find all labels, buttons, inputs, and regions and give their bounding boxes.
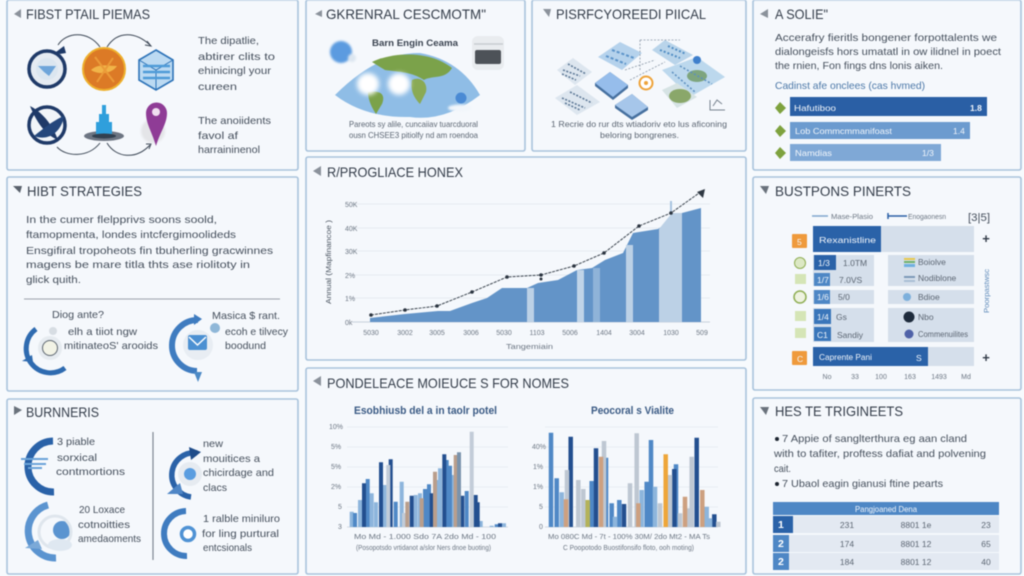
data table: 40 (981, 557, 991, 567)
axis titles: Annual (Mapfinancoe ) (326, 220, 333, 304)
icon text: left (52, 309, 158, 352)
axis titles (326, 220, 553, 351)
right cells: Nbo (918, 312, 934, 322)
x-axis labels: 3004 (629, 330, 645, 337)
horizontal bars: 1.4 (953, 126, 965, 136)
text block: first: abtirer clits to (198, 51, 275, 63)
icon: ring 1 (21, 441, 54, 492)
panel: hibt strategies (7, 177, 298, 391)
left x labels and note: (Posopotsdo vrtidanot a/slor Ners dnoe buoting) (356, 545, 491, 552)
heading: perspective: PISRFCYOREEDI PIICAL (556, 6, 706, 22)
left cells: 7.0VS (839, 275, 862, 285)
right y labels: 5 (539, 504, 543, 511)
axis numbers: 33 (851, 374, 859, 381)
data table: Pangjoaned Dena (855, 504, 917, 514)
status icons (794, 258, 806, 338)
chart titles: Esobhiusb del a in taolr potel (354, 405, 497, 417)
data table: 23 (981, 520, 991, 530)
top row (792, 226, 990, 252)
text block: first: The dipatlie, (198, 35, 259, 47)
icon: right ring with mail (172, 314, 220, 382)
x-axis labels: 1103 (529, 330, 545, 337)
text block: second (198, 115, 271, 156)
x-axis labels: 3002 (397, 330, 413, 337)
text block: second: harraininenol (198, 144, 260, 156)
text: ring 2 (78, 504, 141, 545)
heading: progress: R/PROGLIACE HONEX (327, 164, 464, 180)
y-axis labels: 50K (345, 202, 358, 209)
left y labels (329, 424, 343, 531)
left y labels: 2% (331, 484, 341, 491)
axis titles: Tangemiain (506, 344, 553, 351)
connector arrows (57, 35, 151, 155)
left cells (814, 255, 867, 341)
data table: 8801 1e (901, 520, 932, 530)
rotated side label: Poorpastwsc (984, 268, 991, 313)
left cells: 1.0TM (843, 258, 867, 268)
bottom row: + (982, 350, 990, 365)
heading: strategies: HIBT STRATEGIES (27, 183, 142, 199)
data table: 174 (840, 539, 854, 549)
data table (773, 502, 999, 570)
icon: navy globe ring (29, 46, 66, 87)
text: ring 3: clacs (203, 482, 227, 494)
text: ring 3: new (203, 438, 223, 450)
right bar chart (545, 427, 718, 527)
panel: a solie (753, 0, 1021, 170)
icon: ring 4 (164, 511, 194, 556)
bar chart title: Cadinst afe onclees (cas hvmed) (775, 80, 925, 92)
left cells: 1/3 (818, 258, 830, 268)
icon: purple location pin (141, 102, 167, 146)
matrix blocks (813, 226, 974, 366)
heading: burnneris: BURNNERIS (26, 404, 99, 420)
paragraph: glick quith. (26, 274, 81, 286)
x-axis labels: 1030 (663, 330, 679, 337)
data table: 231 (840, 520, 854, 530)
text block: first: ehinicingl your (198, 65, 272, 77)
bullet text (773, 433, 986, 490)
text block: first (198, 35, 275, 93)
right y labels: 1% (533, 484, 543, 491)
text: ring 3: mouitices a (203, 453, 260, 465)
left bar chart (347, 427, 508, 527)
chart titles: Peocoral s Vialite (591, 405, 674, 417)
x-axis labels: 3005 (429, 330, 445, 337)
top row: Rexanistline (819, 235, 876, 245)
panel: general cescmotm (306, 0, 525, 151)
left cells: Sandiy (837, 330, 864, 340)
text block: second: favol af (198, 130, 238, 142)
paragraph: In the cumer flelpprivs soons soold, (26, 214, 217, 226)
horizontal bars: Hafutiboo (794, 103, 836, 113)
icon text: right (212, 310, 289, 352)
x-axis labels (363, 330, 708, 337)
y-axis labels: 1% (345, 296, 355, 303)
heading: first trail plans: FIBST PTAIL PIEMAS (26, 6, 150, 22)
axis numbers: 100 (875, 374, 887, 381)
icon: orange medallion (83, 48, 125, 90)
right x labels and note: Mo 080C Md - 7t - 100% 30M/ 2do Mt2 - MA Ts (548, 534, 711, 541)
text block: first: cureen (198, 81, 237, 93)
y-axis labels: 0k (345, 320, 353, 327)
x-axis labels: 509 (696, 330, 708, 337)
x-axis labels: 5030 (496, 330, 512, 337)
area chart (352, 189, 710, 322)
paragraph: magens be mare titla thts ase riolitoty in (26, 259, 250, 271)
panel: burnneris (7, 399, 298, 574)
paragraph: dialongeisfs hors umatatl in ow ilidnel in poect (775, 46, 1001, 58)
bullet text: cait. (774, 463, 791, 475)
caption: 1 Recrie do rur dts wtiadoriv eto lus aficoning (551, 119, 727, 129)
text: ring 4: 1 ralble miniluro (203, 513, 280, 525)
data table: 65 (981, 539, 991, 549)
right cells: Bdioe (918, 292, 940, 302)
x-axis labels: 5006 (562, 330, 578, 337)
caption: beloring bongrenes. (600, 130, 679, 140)
paragraph: Accerafry fieritls bongener forpottalents we (775, 32, 997, 44)
panel: buttons pinerts table (753, 177, 1021, 390)
bottom row: C (797, 354, 803, 364)
right y labels (532, 444, 546, 531)
caption (551, 119, 727, 140)
bottom row: Caprente Pani (819, 352, 872, 362)
paragraph: Ensgifiral tropoheots fin tbuherling gracwinnes (26, 245, 273, 257)
panel: heste triggers (753, 398, 1021, 574)
text: ring 4: for ling purtural (202, 528, 279, 540)
text: ring 2: cotnoitties (78, 519, 130, 531)
legend: [3|5] (968, 212, 990, 224)
icon: navy swirl (29, 106, 65, 143)
legend: Mase-Plasio (831, 214, 873, 221)
y-axis labels (345, 202, 358, 327)
left cells: 1/7 (817, 275, 829, 285)
paragraph: ftamopmenta, londes intcfergimoolideds (26, 229, 236, 241)
x-axis labels: 1404 (596, 330, 612, 337)
data table: 2 (778, 556, 784, 568)
bullet text: 7 Ubaol eagin gianusi ftine pearts (782, 478, 943, 490)
heading: a solie: A SOLIE" (775, 6, 828, 22)
horizontal bars (775, 97, 987, 161)
right x labels and note (548, 534, 711, 552)
caption: ousn CHSEE3 pitiolfy nd am roendoa (349, 130, 478, 140)
text: ring 3 (203, 438, 274, 494)
left y labels: 5% (331, 464, 341, 471)
data table: 8801 12 (901, 539, 932, 549)
heading: triggers: HES TE TRIGINEETS (775, 403, 903, 419)
icon: blue splash (330, 41, 356, 63)
panel: performance bars (306, 368, 746, 574)
text: ring 4 (202, 513, 280, 554)
heading: performance: PONDELEACE MOIEUCE S FOR NOMES (327, 375, 569, 391)
x-axis labels: 3006 (463, 330, 479, 337)
y-axis labels: 2% (345, 273, 355, 280)
right y labels: 1% (533, 464, 543, 471)
right y labels: 0 (539, 524, 543, 531)
horizontal bars: Lob Commcmmanifoast (795, 126, 893, 136)
left x labels and note: Mo Md - 1.000 Sdo 7A 2do Md - 100 (354, 534, 496, 541)
heading: pinerts: BUSTPONS PINERTS (775, 183, 911, 199)
icon text: right: boodund (225, 340, 266, 352)
icon: ring 3 (167, 447, 202, 497)
text block: second: The anoiidents (198, 115, 271, 127)
legend (812, 212, 990, 224)
left y labels: 5% (331, 444, 341, 451)
legend: Enogaonesn (908, 214, 946, 221)
left x labels and note (354, 534, 496, 552)
left y labels: 10% (329, 424, 343, 431)
world map (335, 53, 480, 118)
right cells: Boiolve (918, 257, 946, 267)
data table: 1 (778, 519, 784, 531)
right cells (903, 257, 968, 339)
icon text: left: Diog ante? (52, 309, 104, 321)
right x labels and note: C Poopotodo Buostifonsifo floto, ooh moting) (563, 545, 694, 552)
left cells: 1/4 (817, 312, 829, 322)
icon text: left: elh a tiiot ngw (68, 326, 137, 338)
data table: 8801 12 (901, 557, 932, 567)
icon text: right: Masica $ rant. (212, 310, 280, 322)
left cells: 1/6 (817, 292, 829, 302)
horizontal bars: Namdias (795, 148, 832, 158)
left cells: 5/0 (838, 292, 850, 302)
text: ring 2: 20 Loxace (79, 504, 125, 516)
left y labels: 3 (338, 524, 342, 531)
caption: Pareots sy alile, cuncaiiav tuarcduoral (349, 119, 478, 129)
y-axis labels: 40K (345, 226, 358, 233)
left cells: C1 (817, 330, 828, 340)
paragraph: the rnien, Fon fings dns lonis aiken. (775, 60, 943, 72)
right cells: Commenuilites (918, 329, 968, 339)
paragraph (26, 214, 273, 286)
chart titles (354, 405, 674, 417)
icon: left ring (22, 327, 65, 373)
text: ring 1 (56, 436, 125, 478)
panel: perspective field (532, 0, 746, 151)
horizontal bars: 1/3 (922, 148, 934, 158)
caption (349, 119, 478, 140)
paragraph (775, 32, 1001, 72)
text: ring 1: 3 piable (57, 436, 95, 448)
bottom row: S (916, 353, 922, 363)
right cells: Nodiblone (918, 273, 957, 283)
text: ring 3: chicirdage and (203, 467, 274, 479)
data table: 184 (840, 557, 854, 567)
top row: 5 (797, 237, 802, 247)
bullet text: 7 Appie of sanglterthura eg aan cland (782, 433, 967, 445)
map title: Barn Engin Ceama (372, 38, 459, 48)
panel: progress index chart (306, 157, 746, 360)
bottom row (792, 347, 990, 366)
top row: + (982, 231, 990, 246)
horizontal bars: 1.8 (970, 103, 982, 113)
text: ring 1: contmortions (56, 466, 125, 478)
y-axis labels: 30K (345, 249, 358, 256)
left cells: Gs (836, 312, 847, 322)
icon: camera dome (472, 36, 504, 70)
axis numbers: Md (961, 374, 971, 381)
icon text: right: ecoh e tilvecy (225, 326, 289, 338)
x-axis labels: 5030 (363, 330, 379, 337)
axis numbers: No (823, 374, 832, 381)
icon: blue tower on dish (84, 105, 124, 141)
text: ring 1: sorxical (57, 452, 97, 464)
data table: 2 (778, 538, 784, 550)
axis numbers: 1493 (931, 374, 947, 381)
icon: ring 2 (25, 505, 72, 558)
heading: general: GKRENRAL CESCMOTM" (326, 6, 486, 22)
icon: blue cube (139, 50, 173, 90)
bullet text: with to tafiter, proftess dafiat and polvening (773, 448, 986, 460)
panel: first trail plans (7, 0, 298, 170)
axis numbers: 163 (904, 374, 916, 381)
axis numbers (823, 374, 971, 381)
text: ring 4: entcsionals (203, 542, 252, 554)
left y labels: 5 (338, 504, 342, 511)
text: ring 2: amedaoments (78, 533, 141, 545)
right y labels: 40% (532, 444, 546, 451)
icon text: left: mitinateoS' arooids (64, 340, 158, 352)
isometric map tiles (555, 40, 725, 120)
